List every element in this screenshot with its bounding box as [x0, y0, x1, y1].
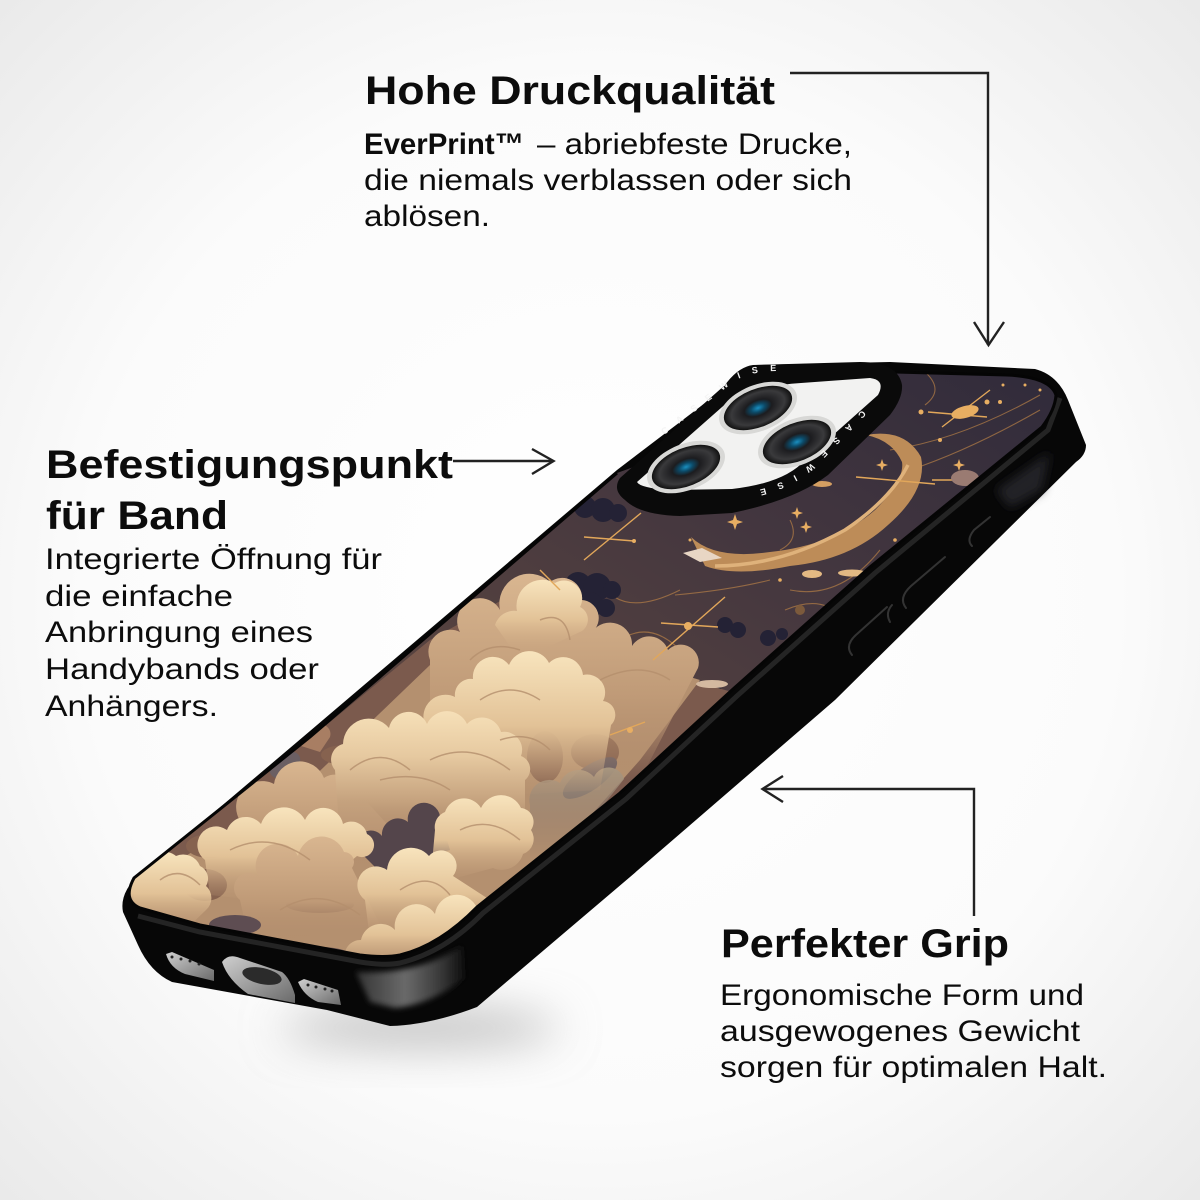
side band detail	[996, 452, 1050, 508]
star bursts	[540, 390, 990, 735]
cloud B: main upper	[423, 651, 615, 800]
heading: Perfekter Grip	[721, 922, 1009, 966]
small brown cloud	[301, 726, 330, 752]
grey patches	[270, 752, 618, 799]
cloud crest strokes	[160, 618, 670, 915]
corner highlight	[356, 945, 465, 1008]
body text: Integrierte Öffnung für	[45, 543, 382, 576]
dark pocket in clouds	[364, 802, 450, 870]
tan cloud mass	[133, 665, 700, 955]
callout: Befestigungspunkt für Band	[45, 443, 453, 723]
arrow: grip	[762, 776, 974, 916]
moon crescent	[683, 434, 922, 572]
cloud C: main middle	[331, 711, 530, 812]
lens: top	[711, 371, 805, 445]
body text	[720, 979, 1107, 1084]
arrow: strap attachment	[453, 449, 554, 474]
camera island	[637, 378, 881, 490]
callout: Perfekter Grip	[720, 922, 1107, 1084]
arrow: print quality	[790, 73, 1004, 345]
bottom ports	[166, 952, 341, 1005]
dark clouds	[567, 498, 788, 689]
lens: left	[639, 430, 733, 504]
cloud G	[358, 848, 486, 924]
side buttons	[849, 517, 990, 655]
side rim	[138, 398, 1060, 964]
heading: für Band	[46, 494, 228, 538]
body text: EverPrint™	[364, 128, 524, 161]
screen rim	[129, 372, 1056, 956]
body text	[45, 543, 382, 723]
callout: Hohe Druckqualität	[364, 69, 852, 233]
lens: right	[750, 405, 844, 479]
camera bump: CASEWISE	[760, 411, 866, 496]
cloud E	[433, 795, 534, 870]
cloud: grey-tan right	[530, 768, 624, 844]
heading: Befestigungspunkt	[46, 443, 453, 487]
body text: – abriebfeste Drucke,	[537, 128, 852, 161]
case body	[122, 362, 1086, 1026]
cloud H: bottom left	[130, 852, 212, 920]
body text	[364, 128, 852, 233]
body text: die niemals verblassen oder sich	[364, 164, 852, 197]
body text: ausgewogenes Gewicht	[720, 1015, 1081, 1048]
speaker left	[166, 952, 214, 981]
cloud A: tall back cloud	[428, 574, 699, 780]
heading	[46, 443, 453, 538]
body text: Ergonomische Form und	[720, 979, 1084, 1012]
body text: die einfache	[45, 580, 233, 613]
drop shadow under phone	[280, 1008, 560, 1048]
USB port	[222, 956, 295, 1003]
ring lettering: CASEWISE	[662, 364, 776, 434]
body text: Anbringung eines	[45, 616, 313, 649]
bottom purple shade	[209, 915, 261, 933]
cloud F	[234, 836, 366, 913]
lower cloud base	[169, 602, 728, 856]
swirl lines	[600, 372, 1040, 650]
cloud I: bottom front	[346, 894, 476, 955]
heading: Hohe Druckqualität	[365, 69, 775, 113]
cloud: left back band	[236, 761, 338, 824]
body text: Handybands oder	[45, 653, 319, 686]
cloud A highlight	[495, 580, 588, 633]
brown valleys	[183, 731, 619, 913]
body text: sorgen für optimalen Halt.	[720, 1051, 1107, 1084]
speaker right	[298, 979, 341, 1005]
body text: Anhängers.	[45, 690, 218, 723]
cloud D	[197, 807, 374, 905]
stars	[627, 384, 1042, 733]
body text: ablösen.	[364, 200, 490, 233]
camera bump	[617, 362, 902, 516]
phone case	[122, 362, 1086, 1026]
small pink cloud	[951, 470, 979, 486]
printed back artwork	[110, 350, 1060, 975]
